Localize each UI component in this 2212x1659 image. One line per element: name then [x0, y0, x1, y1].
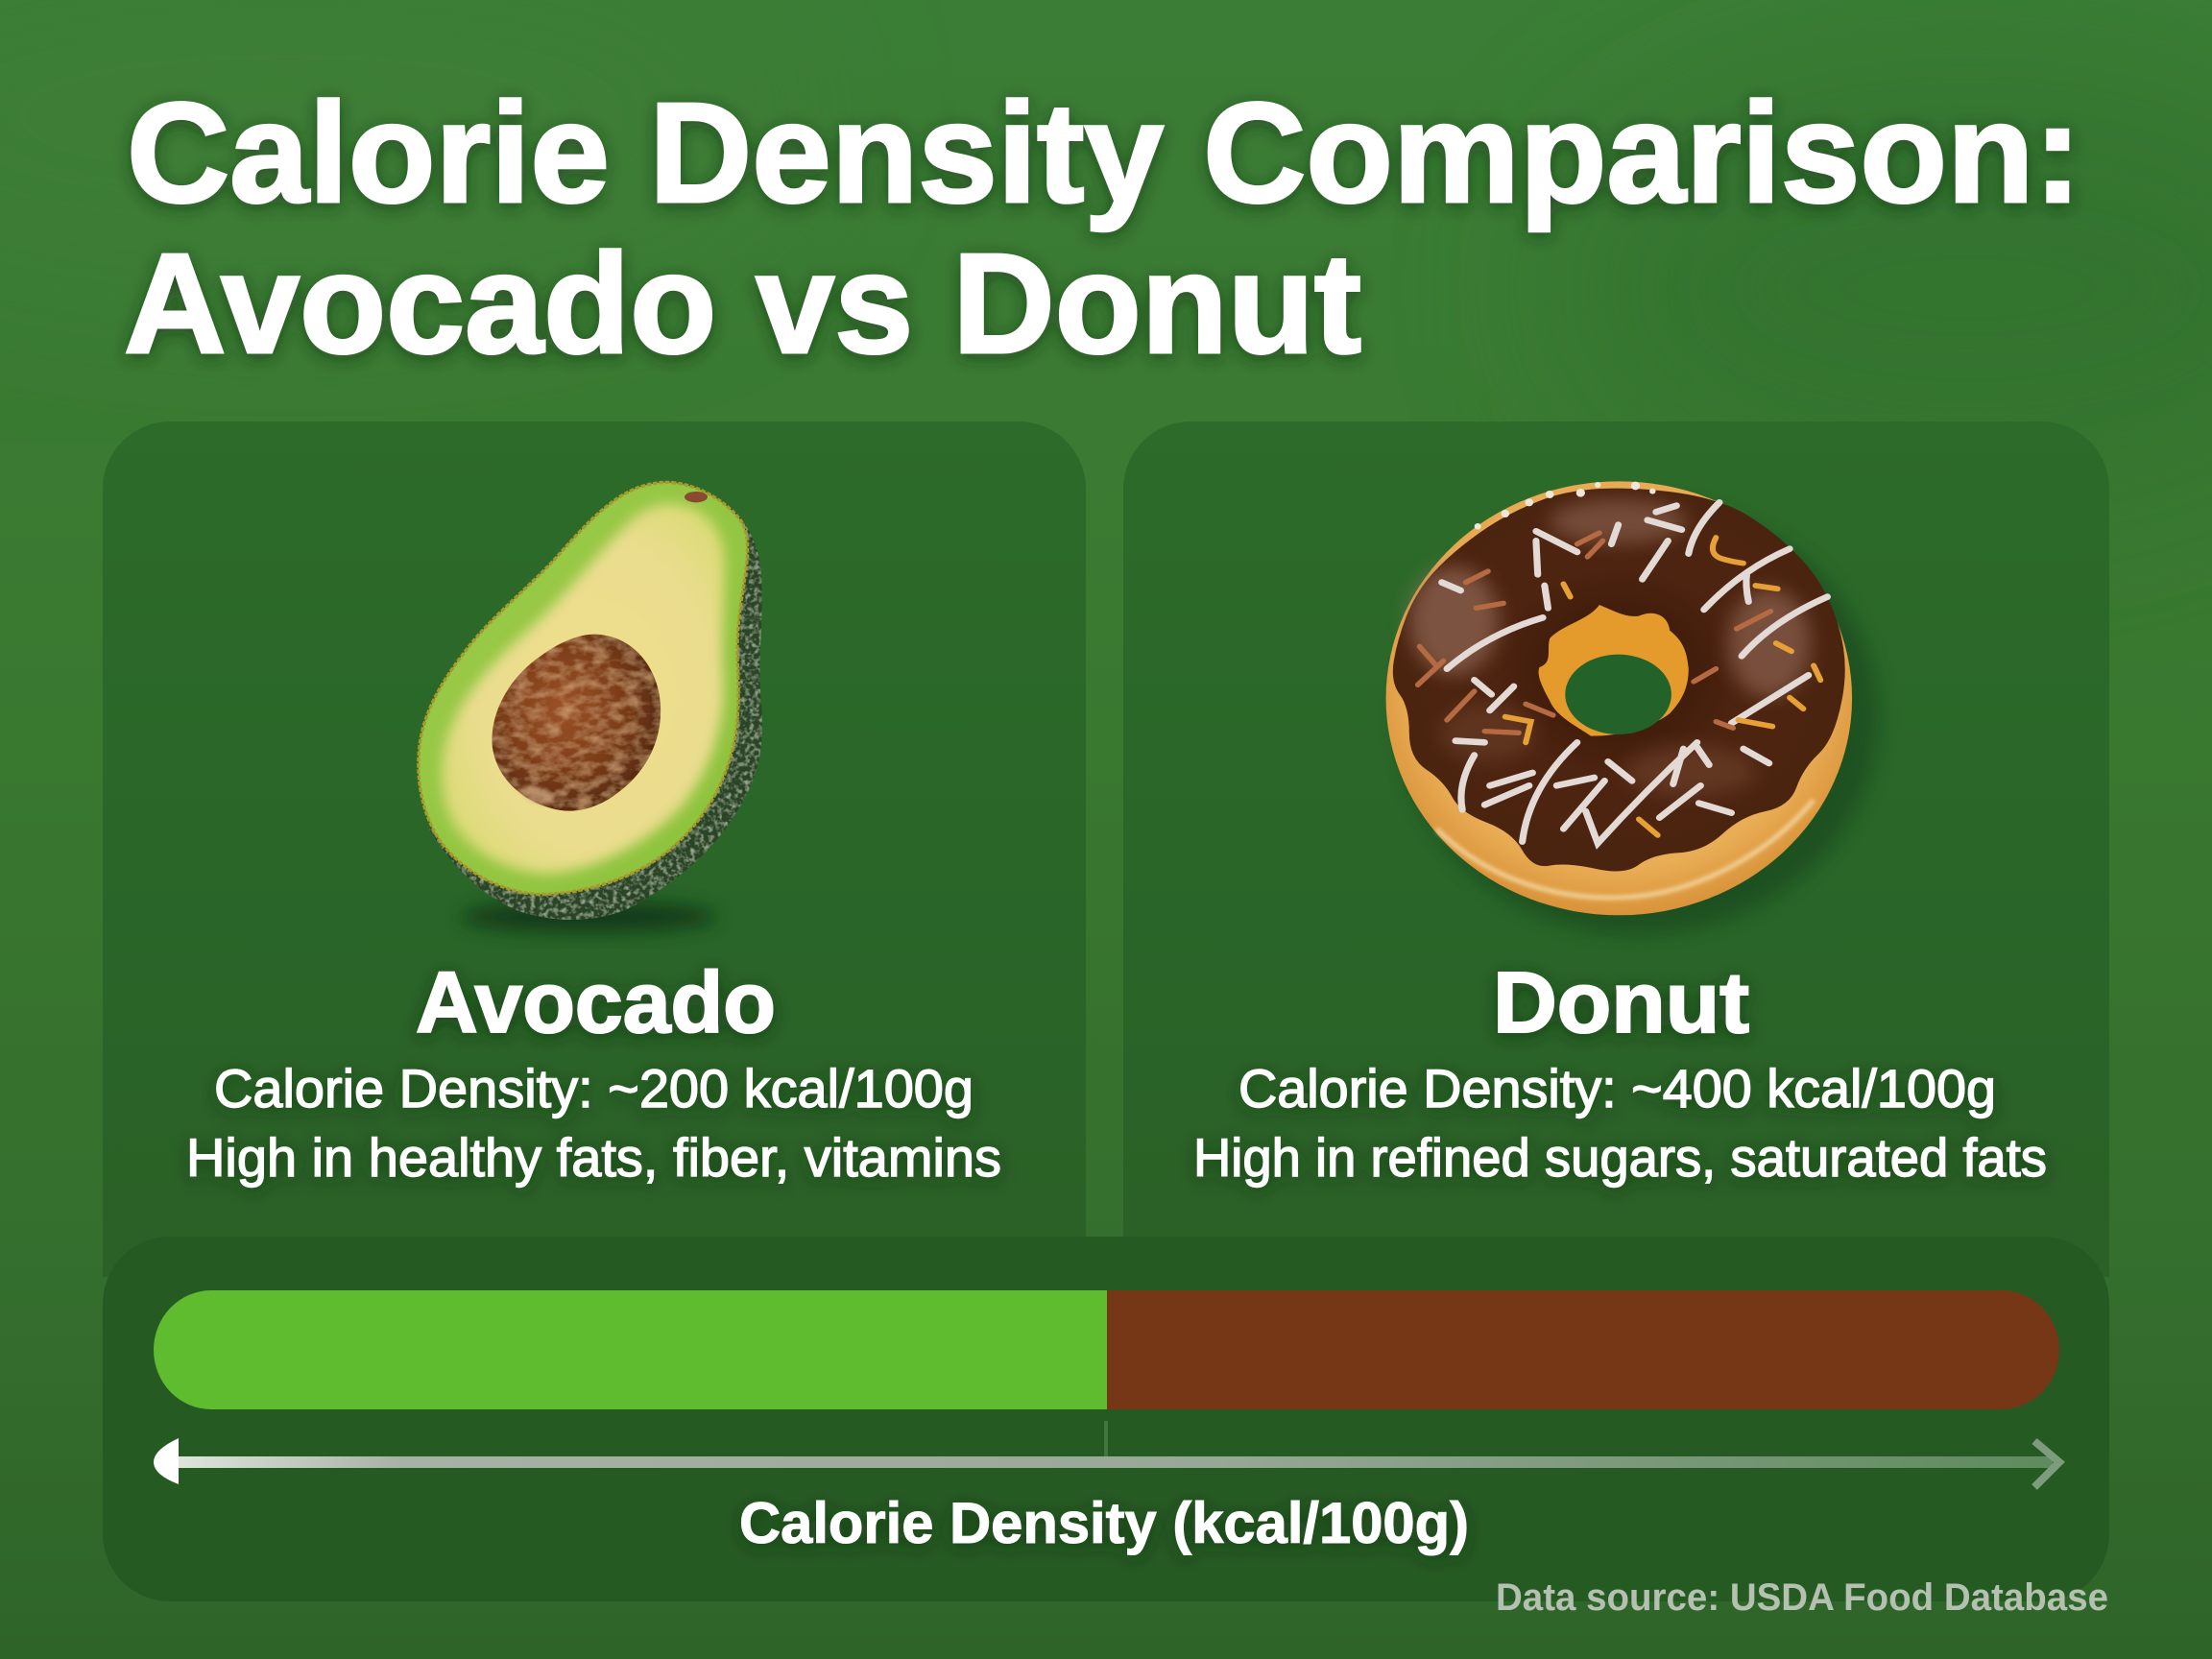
- stacked comparison bar: [154, 1290, 2059, 1409]
- avocado details: Calorie Density: ~200 kcal/100g: [214, 1058, 974, 1118]
- icon: donut: [1386, 481, 1879, 934]
- panel: avocado card: [103, 421, 1086, 1277]
- title: Avocado vs Donut: [124, 225, 1361, 383]
- panel: donut card: [1123, 421, 2109, 1277]
- bar segment: donut: [1107, 1290, 2059, 1409]
- food name: donut: Donut: [1493, 955, 1749, 1051]
- bar segment: avocado: [154, 1290, 1107, 1409]
- panel: calorie density scale: [103, 1237, 2109, 1601]
- donut details: Calorie Density: ~400 kcal/100g: [1238, 1058, 1996, 1118]
- axis tick: [1104, 1421, 1108, 1456]
- donut details: [1193, 1058, 2047, 1188]
- donut details: High in refined sugars, saturated fats: [1193, 1127, 2047, 1188]
- data source note: Data source: USDA Food Database: [1496, 1576, 2108, 1619]
- avocado details: High in healthy fats, fiber, vitamins: [186, 1127, 1001, 1188]
- title: [124, 74, 2081, 383]
- title: Calorie Density Comparison:: [127, 74, 2081, 232]
- icon: avocado: [419, 482, 762, 933]
- arrow: calorie density axis: [154, 1438, 2059, 1487]
- food name: avocado: Avocado: [416, 955, 776, 1051]
- avocado details: [186, 1058, 1001, 1188]
- axis label: Calorie Density (kcal/100g): [739, 1491, 1469, 1555]
